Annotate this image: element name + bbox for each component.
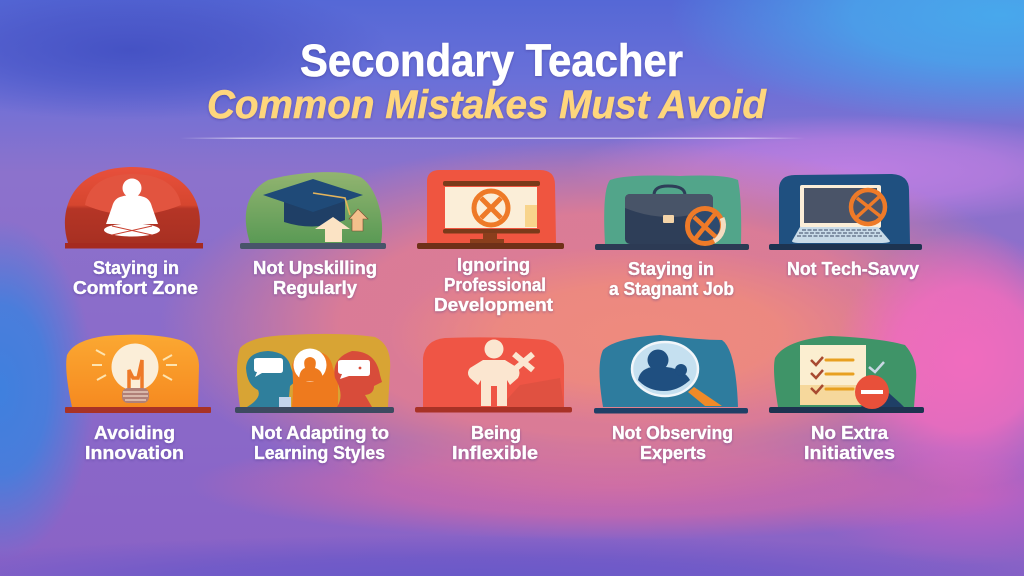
panel: Not Upskilling Regularly — [240, 172, 386, 298]
label — [251, 423, 389, 463]
label: Staying in — [93, 258, 179, 278]
panel: Not Observing Experts — [594, 335, 748, 463]
label: Not Tech-Savvy — [787, 259, 919, 279]
label — [85, 423, 184, 463]
label: No Extra — [811, 423, 889, 443]
icon: graduation cap with arrows — [240, 172, 386, 249]
label — [253, 258, 377, 298]
panel: Staying in a Stagnant Job — [595, 176, 749, 299]
icon: projector screen with cross — [417, 170, 564, 249]
label — [434, 255, 553, 315]
label: Ignoring — [457, 255, 530, 275]
label: Initiatives — [804, 443, 895, 463]
label: Learning Styles — [254, 443, 385, 463]
label — [609, 259, 734, 299]
label: Experts — [640, 443, 706, 463]
icon: light bulb — [65, 335, 211, 413]
label — [452, 423, 538, 463]
panel: Being Inflexible — [415, 337, 572, 463]
label — [804, 423, 895, 463]
icon: magnifying glass over people — [594, 335, 748, 414]
label: Not Upskilling — [253, 258, 377, 278]
label: Inflexible — [452, 443, 538, 463]
label — [612, 423, 733, 463]
heading: Common Mistakes Must Avoid: Common Mistakes Must Avoid — [207, 83, 768, 127]
label: Professional — [444, 275, 546, 295]
label: a Stagnant Job — [609, 279, 734, 299]
panel: Avoiding Innovation — [65, 335, 211, 463]
label: Development — [434, 295, 553, 315]
title divider — [180, 138, 805, 139]
panel: Not Adapting to Learning Styles — [235, 334, 394, 463]
panel: No Extra Initiatives — [769, 336, 924, 463]
icon: three heads — [235, 334, 394, 413]
icon: laptop with cross — [769, 174, 922, 250]
label: Regularly — [273, 278, 357, 298]
title — [207, 35, 768, 127]
label: Innovation — [85, 443, 184, 463]
label: Avoiding — [94, 423, 175, 443]
label: Staying in — [628, 259, 714, 279]
label: Being — [471, 423, 521, 443]
panel: Ignoring Professional Development — [417, 170, 564, 315]
icon: briefcase with cross — [595, 176, 749, 250]
heading: Secondary Teacher: Secondary Teacher — [300, 35, 683, 86]
label: Comfort Zone — [73, 278, 198, 298]
label: Not Observing — [612, 423, 733, 443]
panel: Not Tech-Savvy — [769, 174, 922, 279]
icon: meditating person on dome — [65, 167, 203, 248]
panel: Staying in Comfort Zone — [65, 167, 203, 298]
label — [73, 258, 198, 298]
label: Not Adapting to — [251, 423, 389, 443]
icon: checklist with minus badge — [769, 336, 924, 413]
icon: standing person with cross — [415, 337, 572, 412]
